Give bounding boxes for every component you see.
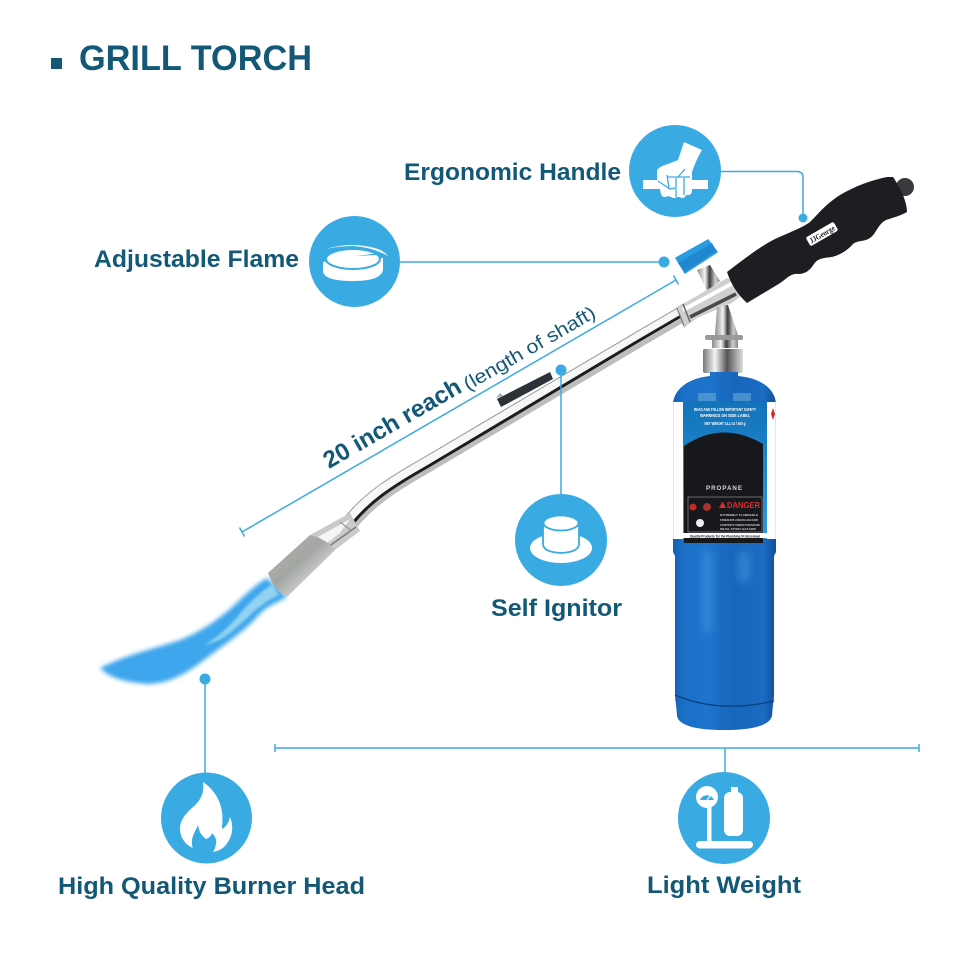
- tank label: EXTREMELY FLAMMABLE: [720, 513, 758, 517]
- callout: self ignitor: Self Ignitor: [491, 595, 622, 622]
- handle: JJGeorge: [808, 223, 837, 245]
- reach label: (length of shaft): [460, 303, 600, 395]
- flame: [100, 578, 287, 684]
- callout: adjustable flame: [94, 216, 670, 307]
- tank label: Quality Products for the Plumbing Professional: [690, 534, 760, 538]
- tank label: WARNINGS ON SIDE LABEL: [700, 413, 750, 418]
- shaft: [350, 303, 700, 527]
- reach label: [318, 303, 600, 474]
- tank label: INHALATION HAZARD: [720, 527, 757, 531]
- callout: ergonomic handle: [404, 125, 808, 222]
- icon: ignitor button: [530, 516, 592, 563]
- ignitor clip: [496, 372, 553, 407]
- tank label: DANGER: [727, 500, 760, 510]
- tank label: FIRE/EXPLOSION HAZARD: [720, 518, 759, 522]
- callout: light weight: [275, 744, 919, 899]
- tank label: PROPANE: [706, 485, 742, 492]
- propane tank: [673, 372, 776, 730]
- chrome torch body: [677, 278, 741, 328]
- icon: flame dial: [323, 245, 388, 281]
- gas connector: [703, 305, 743, 373]
- title: GRILL TORCH: [79, 39, 312, 78]
- torch product photo: [100, 177, 914, 730]
- callout: ergonomic handle: Ergonomic Handle: [404, 159, 621, 186]
- tank label: [673, 402, 776, 543]
- icon: scale and bottle: [696, 786, 753, 848]
- chrome valve stem: [697, 265, 720, 291]
- callout: adjustable flame: Adjustable Flame: [94, 246, 299, 273]
- tank label: READ AND FOLLOW IMPORTANT SAFETY: [694, 407, 756, 412]
- icon: hand gripping bar: [643, 142, 708, 198]
- reach dimension line: [240, 276, 678, 536]
- callout: high quality burner head: High Quality Burner Head: [58, 873, 365, 900]
- reach label: 20 inch reach: [318, 373, 466, 474]
- tank label: CONTENTS UNDER PRESSURE: [720, 523, 760, 527]
- tank label: NET WEIGHT 14.1 oz / 400 g: [704, 421, 746, 426]
- callout: high quality burner head: [58, 674, 365, 900]
- icon: fire: [180, 782, 232, 856]
- burner nozzle: [268, 513, 360, 597]
- valve knob: [676, 240, 717, 273]
- callout: self ignitor: [491, 364, 622, 622]
- handle: [727, 177, 914, 303]
- callout: light weight: Light Weight: [647, 872, 801, 899]
